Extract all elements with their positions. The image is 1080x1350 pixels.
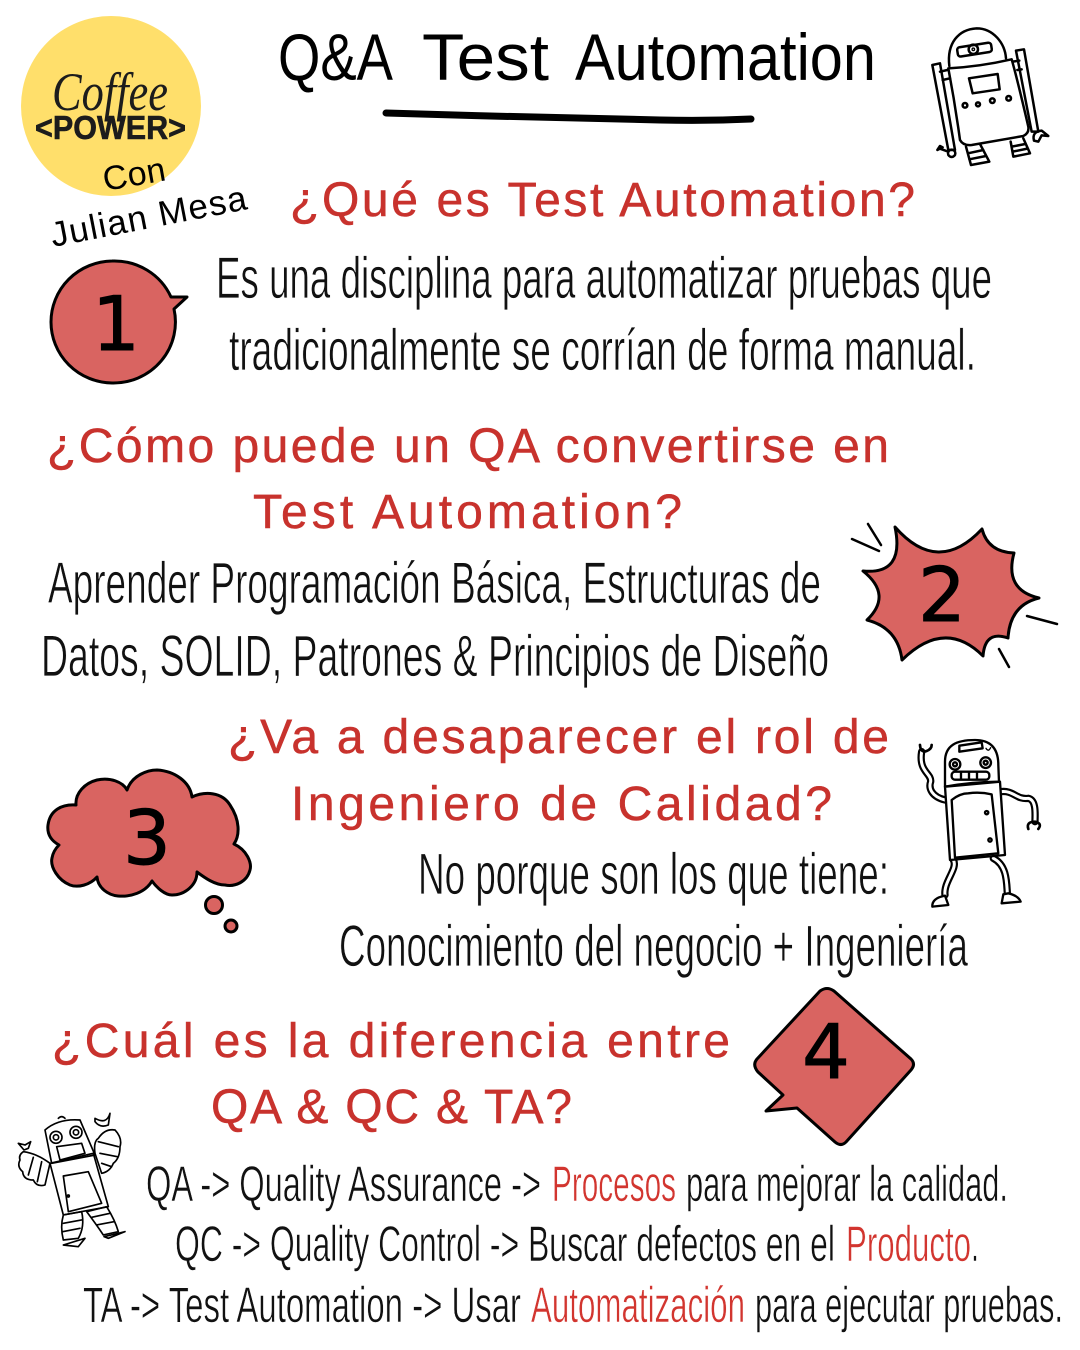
badge: number 4 diamond bubble — [755, 988, 914, 1144]
icon: robot with long arms — [932, 28, 1048, 165]
definition: TA line: Automatización — [531, 1277, 745, 1333]
badge: number 3 thought cloud — [48, 770, 250, 932]
badge: number 1 speech bubble: 1 — [92, 280, 140, 368]
logo: Coffee Power badge: <POWER> — [35, 109, 186, 146]
title — [278, 20, 876, 94]
badge: number 2 starburst: 2 — [918, 551, 966, 639]
heading: question 4 line 1: ¿Cuál es la diferencia entre — [52, 1015, 730, 1068]
heading: question 4 line 2: QA & QC & TA? — [211, 1081, 572, 1134]
badge: number 1 speech bubble — [51, 261, 187, 383]
heading: question 3 line 2: Ingeniero de Calidad? — [291, 778, 832, 831]
badge: number 2 starburst — [852, 524, 1057, 667]
definition: QA line: Procesos — [552, 1156, 676, 1212]
logo: Coffee Power badge — [21, 16, 201, 196]
title: Test — [422, 20, 549, 94]
definition: QC line: Producto — [846, 1216, 971, 1272]
title underline — [386, 113, 751, 120]
author credit: Con: Con — [100, 151, 168, 199]
definition: TA line: TA -> Test Automation -> Usar — [83, 1277, 521, 1333]
heading: question 3 line 1: ¿Va a desaparecer el rol de — [228, 711, 889, 764]
badge: number 4 diamond bubble: 4 — [802, 1008, 850, 1096]
title: Q&A — [278, 20, 393, 94]
badge: number 3 thought cloud: 3 — [123, 794, 171, 882]
logo: Coffee Power badge: Coffee — [52, 62, 168, 122]
icon: waving robot — [920, 740, 1040, 907]
definition: TA line — [83, 1277, 1063, 1333]
heading: question 2 line 1: ¿Cómo puede un QA convertirse en — [47, 420, 889, 473]
definition: QC line: . — [971, 1216, 979, 1272]
heading: question 1: ¿Qué es Test Automation? — [290, 174, 915, 227]
title: Automation — [575, 20, 876, 94]
heading: question 2 line 2: Test Automation? — [253, 486, 682, 539]
definition: QA line: QA -> Quality Assurance -> — [146, 1156, 541, 1212]
author credit: Julian Mesa: Julian Mesa — [47, 178, 250, 255]
icon: puffy-armed robot — [18, 1113, 125, 1247]
